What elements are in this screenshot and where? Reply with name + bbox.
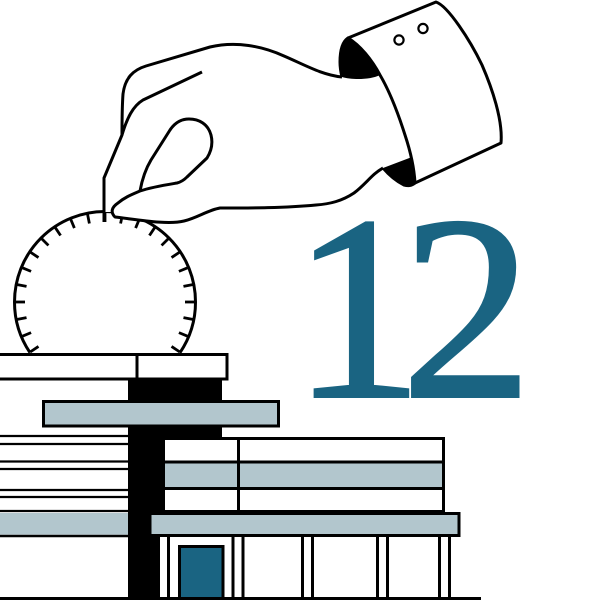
hand fill [104,44,412,222]
icon: hand with shirt cuff [104,2,501,222]
icon: dial circle with tick marks [14,212,196,392]
black slab edge cover [128,512,150,538]
grey canopy slab [44,402,278,426]
column pairs [168,536,450,598]
cuff button left [394,35,404,45]
right wing grey canopy slab [150,514,459,536]
left wing floor lines [0,436,128,511]
ground line [0,597,481,600]
cuff lower inner shadow [383,157,415,186]
number 12: 1 [292,162,424,454]
building illustration [0,354,481,598]
number 12: 2 [401,162,532,454]
right wing upper floors [165,438,444,512]
blue door [180,546,223,598]
cuff upper inner shadow [340,38,380,79]
hand lower outline and thumb [112,119,383,222]
roof slab [0,354,227,379]
hand back outline [104,44,342,222]
left wing grey band [0,513,128,534]
shirt cuff [348,2,501,183]
cuff button right [418,24,428,33]
finger crease line [122,72,202,135]
black central column [128,378,222,598]
